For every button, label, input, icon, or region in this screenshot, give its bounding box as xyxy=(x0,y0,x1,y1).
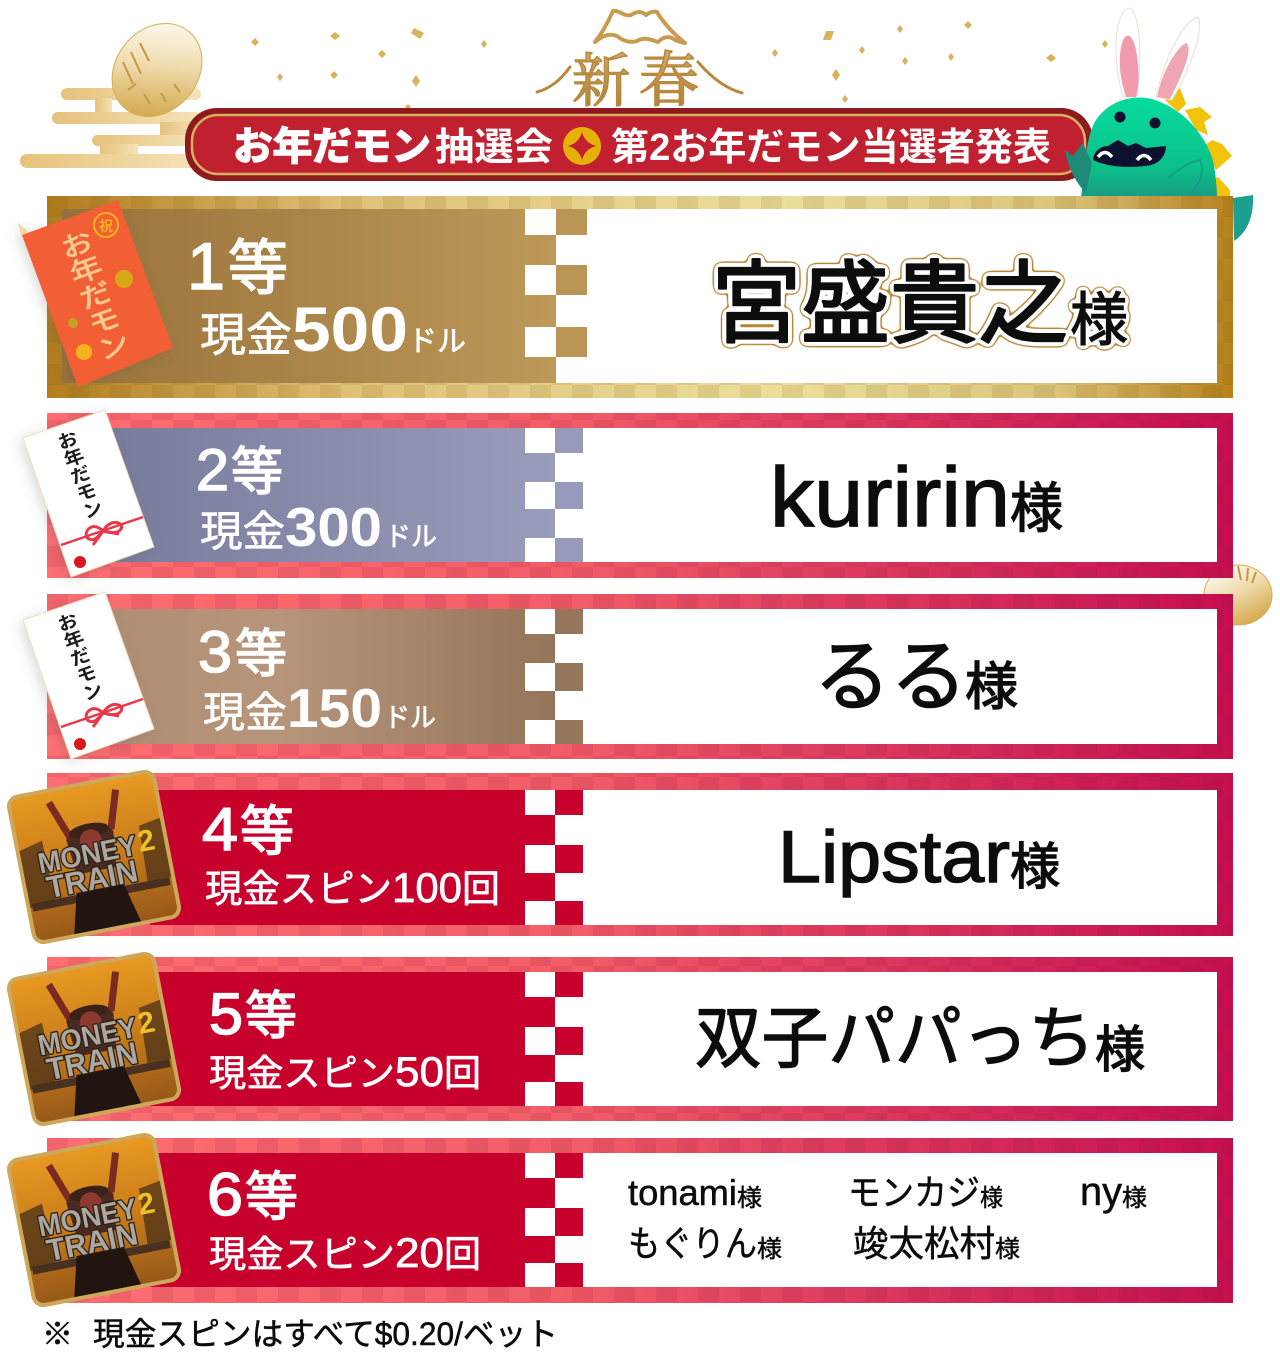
name area xyxy=(555,1153,1217,1287)
prize label: 500 xyxy=(292,295,408,365)
winner name: 様 xyxy=(1095,1022,1145,1078)
prize label: 現金スピン xyxy=(209,1053,395,1094)
rabbit ears xyxy=(1116,8,1140,97)
footnote: 現金スピンはすべて$0.20/ベット xyxy=(93,1316,558,1352)
winner name: 様 xyxy=(1070,288,1128,353)
spikes and tail xyxy=(1165,88,1232,198)
prize label: ドル xyxy=(408,326,466,358)
prize label: 100 xyxy=(392,864,462,911)
icon: Money Train 2 game card, prize 6: TRAIN xyxy=(44,1216,141,1268)
winner name: Lipstar xyxy=(778,817,1010,898)
red border xyxy=(47,1138,1233,1303)
footnote: ※ xyxy=(42,1317,73,1352)
prize band xyxy=(150,1153,555,1287)
winner names: モンカジ xyxy=(848,1172,980,1213)
winner names: 様 xyxy=(980,1185,1003,1212)
prize label: 現金スピン xyxy=(205,869,392,911)
red border xyxy=(47,413,1233,578)
icon: white noshi envelope 2 xyxy=(23,410,154,577)
red border xyxy=(47,957,1233,1121)
prize label: 等 xyxy=(245,1168,298,1227)
prize label xyxy=(209,982,481,1095)
prize label: 等 xyxy=(240,802,294,862)
icon: Money Train 2 game card, prize 4 xyxy=(7,770,181,944)
winner names: 様 xyxy=(1122,1185,1147,1212)
prize label: 等 xyxy=(231,444,283,502)
prize label: 6 xyxy=(207,1161,243,1228)
prize label: 150 xyxy=(287,677,382,739)
winner names: tonami xyxy=(628,1172,737,1213)
icon: red otoshidama envelope xyxy=(18,200,173,387)
title characters xyxy=(572,48,699,114)
mascot: green monster with rabbit ears xyxy=(1065,8,1253,241)
icon: Money Train 2 game card, prize 6: MONEY xyxy=(35,1193,140,1243)
icon: Money Train 2 game card, prize 5: 2 xyxy=(135,1005,158,1041)
prize label xyxy=(187,229,466,365)
prize band xyxy=(100,428,555,562)
gold clouds and koban coin xyxy=(20,5,221,168)
icon: Money Train 2 game card, prize 5 xyxy=(7,952,181,1126)
prize label: 回 xyxy=(462,869,500,911)
panel: prize 6 xyxy=(47,1138,1233,1303)
icon: white noshi envelope 3: お年だモン xyxy=(52,610,105,704)
winner name: 宮盛貴之 xyxy=(712,255,1068,355)
name area xyxy=(555,609,1217,744)
mouth xyxy=(1093,140,1166,167)
winner names: 様 xyxy=(757,1236,782,1263)
prize label xyxy=(196,438,437,558)
winner name: kuririn xyxy=(770,450,1010,544)
winner names: 様 xyxy=(995,1236,1020,1263)
prize label: 現金 xyxy=(200,508,285,555)
winner name: 様 xyxy=(1010,479,1063,539)
prize label xyxy=(207,1161,481,1276)
small gold coin behind rows xyxy=(1204,565,1272,625)
mountain slopes xyxy=(537,62,742,93)
prize label: 20 xyxy=(395,1229,444,1276)
icon: red otoshidama envelope: 祝 xyxy=(99,218,113,234)
icon: Money Train 2 game card, prize 5: TRAIN xyxy=(44,1035,141,1087)
icon: Money Train 2 game card, prize 4: 2 xyxy=(135,823,158,859)
name area xyxy=(555,428,1217,562)
prize label: 現金 xyxy=(203,689,287,736)
red border xyxy=(47,773,1233,936)
title characters: 新 xyxy=(572,49,630,114)
header banner pill xyxy=(185,108,1093,181)
gold confetti xyxy=(251,21,1108,110)
winner name: 様 xyxy=(965,659,1018,717)
winner name: 双子パパっち xyxy=(695,1001,1095,1077)
icon: Money Train 2 game card, prize 4: TRAIN xyxy=(44,853,141,905)
arm xyxy=(1065,143,1092,193)
gold border xyxy=(47,196,1233,398)
prize label: 等 xyxy=(235,626,287,684)
prize label: 回 xyxy=(444,1053,481,1094)
prize label: 4 xyxy=(202,796,238,863)
prize label: 現金スピン xyxy=(209,1234,395,1275)
icon: Mt Fuji outline xyxy=(595,11,685,43)
eyes xyxy=(1114,112,1126,122)
winner name: るる xyxy=(814,632,967,721)
prize label: ドル xyxy=(384,703,436,733)
prize label: ドル xyxy=(385,522,437,552)
winner names xyxy=(628,1170,1147,1264)
red border xyxy=(47,594,1233,759)
prize label: 1 xyxy=(187,229,225,303)
icon: gold coin xyxy=(563,127,601,165)
banner text: 第2お年だモン当選者発表: 第2お年だモン当選者発表 xyxy=(611,127,1051,169)
title characters: 春 xyxy=(639,48,699,114)
prize label: 3 xyxy=(198,620,232,685)
panel: prize 3 xyxy=(47,594,1233,759)
prize label xyxy=(198,620,436,739)
icon: Money Train 2 game card, prize 6: 2 xyxy=(135,1186,158,1222)
prize label: 2 xyxy=(196,438,229,503)
prize band xyxy=(62,209,556,383)
winner names: もぐりん xyxy=(628,1223,757,1264)
body xyxy=(1081,98,1217,198)
winner names: 竣太松村 xyxy=(853,1223,995,1264)
name area xyxy=(555,790,1217,925)
prize label: 50 xyxy=(395,1048,444,1095)
prize band xyxy=(150,972,555,1106)
icon: red otoshidama envelope: お年だモン xyxy=(53,226,133,365)
panel: prize 4 xyxy=(47,773,1233,936)
panel: prize 1 xyxy=(47,196,1233,398)
panel: prize 5 xyxy=(47,957,1233,1121)
prize label: 回 xyxy=(444,1234,481,1275)
prize band xyxy=(150,790,555,925)
prize label: 300 xyxy=(285,496,382,558)
name area xyxy=(556,209,1217,383)
prize label: 等 xyxy=(228,235,288,302)
prize label: 現金 xyxy=(200,309,292,361)
prize label: 5 xyxy=(209,982,243,1047)
name area xyxy=(555,972,1217,1106)
prize label: 等 xyxy=(245,988,297,1046)
panel: prize 2 xyxy=(47,413,1233,578)
title: Mt Fuji and 新春 xyxy=(537,11,742,114)
winner names: ny xyxy=(1080,1170,1122,1214)
banner text: お年だモン抽選会: お年だモン xyxy=(233,126,431,169)
icon: Money Train 2 game card, prize 5: MONEY xyxy=(35,1012,140,1062)
icon: white noshi envelope 2: お年だモン xyxy=(52,428,105,522)
prize label xyxy=(202,796,500,911)
winner name: 様 xyxy=(1010,839,1060,895)
icon: white noshi envelope 3 xyxy=(23,592,154,759)
icon: Money Train 2 game card, prize 6 xyxy=(7,1133,181,1307)
prize band xyxy=(100,609,555,744)
winner names: 様 xyxy=(737,1185,762,1212)
icon: Money Train 2 game card, prize 4: MONEY xyxy=(35,830,140,880)
header banner pill: 抽選会 xyxy=(435,127,553,169)
